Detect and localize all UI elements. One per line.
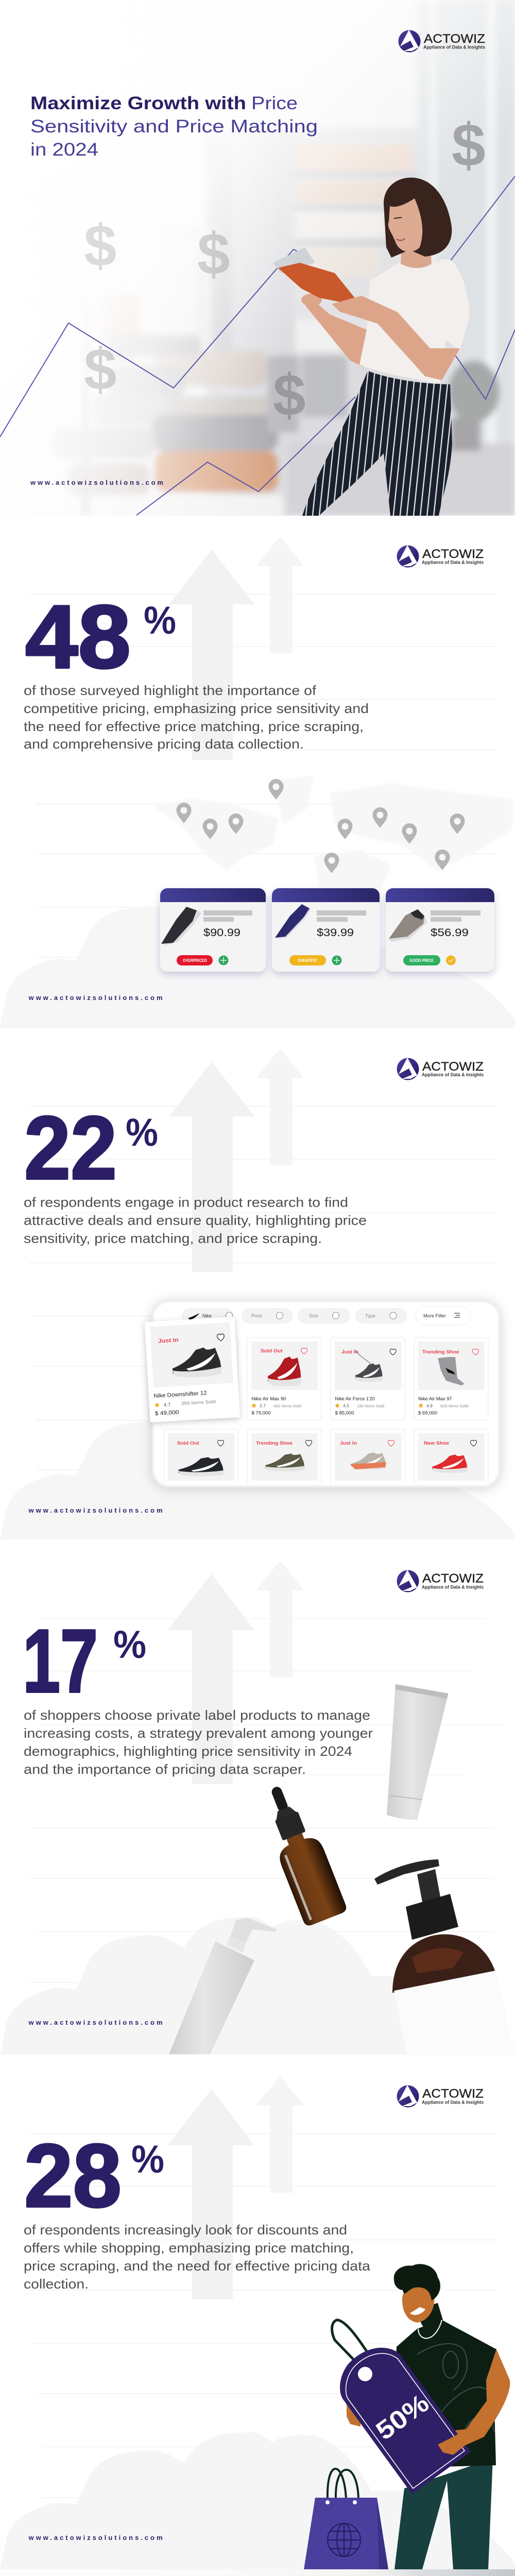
statistic 28%: % [131,2138,164,2181]
dollar signs: $ [84,213,116,279]
featured card: Nike Downshifter 12: 4.7 [164,1402,170,1408]
product: amber pump bottle [374,1859,515,2054]
small arrow [256,536,304,653]
website url: www.actowizsolutions.com [28,994,163,1002]
logo: ACTOWIZ [422,547,484,561]
stat description: price scraping, and the need for effective pricing data [24,2258,371,2274]
location pins [176,779,465,873]
statistic 22%: % [126,1111,158,1155]
stat description: and the importance of pricing data scraper. [24,1761,306,1777]
logo [397,2085,484,2107]
stat description: sensitivity, price matching, and price scraping. [24,1230,322,1246]
logo: ACTOWIZ [424,32,485,46]
world map [153,775,512,888]
small arrow [256,1048,304,1165]
price card: overpriced: $90.99 [203,927,241,939]
dollar signs: $ [273,363,305,428]
product: Nike Air Force 1'20: $ 85,000 [335,1411,354,1416]
stat description [24,1194,367,1246]
price card: good price: GOOD PRICE [409,958,434,963]
product: Nike Air Max 97: 4.9 [426,1403,433,1409]
dollar signs: $ [197,222,230,287]
stat description [24,683,369,752]
title: Maximize Growth with [30,93,246,113]
logo: Appliance of Data & Insights [422,1585,484,1590]
filter bar: Nike [202,1313,212,1319]
statistic 48% [25,586,176,687]
price card: overpriced [160,888,266,972]
product: Nike Air Force 1'20 [335,1349,396,1416]
line chart arrows [0,176,515,515]
stat description: competitive pricing, emphasizing price sensitivity and [24,701,369,716]
price card: overpriced: OVERPRICED [183,958,207,963]
woman holding a product pack [273,178,470,516]
stat description: and comprehensive pricing data collection. [24,736,304,752]
statistic 17%: 17 [23,1611,98,1711]
product: Nike Air Force 1'20: Nike Air Force 1'20 [335,1396,375,1402]
discount price tag [332,2320,471,2494]
product: Nike Air Max 97: Nike Air Max 97 [418,1396,452,1402]
filter bar [182,1307,471,1325]
logo [397,545,484,568]
panel: 17% stat [0,1561,515,2055]
cloud background [0,1917,515,2055]
stat description: increasing costs, a strategy prevalent among younger [24,1725,373,1741]
product: Nike Air Force 1'20: 196 Items Sold [357,1403,384,1409]
featured card: Nike Downshifter 12: Nike Downshifter 12 [153,1390,207,1399]
second row products: New Shoe [424,1440,449,1446]
big arrow [169,550,254,760]
statistic 48%: 48 [25,586,131,687]
logo: ACTOWIZ [422,2087,484,2101]
featured card: Nike Downshifter 12: Just In [158,1337,179,1345]
logo [397,1058,484,1080]
second row products [177,1440,476,1476]
product: Nike Air Max 90: Sold Out [261,1348,282,1353]
panel: call to action [266,2569,515,2576]
stat description: collection. [24,2276,89,2292]
second row products: Sold Out [177,1440,199,1446]
logo: ACTOWIZ [422,1060,484,1074]
filter bar: More Filter [423,1313,446,1319]
dollar signs: $ [84,337,116,402]
statistic 28%: 28 [24,2125,122,2226]
product: Nike Air Max 90: 402 Items Sold [273,1403,301,1409]
stat description [24,1707,373,1777]
website url: www.actowizsolutions.com [28,2019,163,2026]
product: Nike Air Force 1'20: Just In [341,1349,358,1354]
featured card: Nike Downshifter 12: 369 Items Sold [181,1399,216,1406]
discount price tag: 50% [371,2388,434,2446]
price card: cheapest: CHEAPEST [298,958,318,963]
product: white tube [387,1684,448,1820]
grid cards [164,1337,488,1484]
stat description: offers while shopping, emphasizing price matching, [24,2240,354,2256]
website url: www.actowizsolutions.com [30,479,163,486]
logo: Appliance of Data & Insights [422,2100,484,2105]
hero photo background: blurred store [0,0,515,516]
panel: 28% stat [0,2076,515,2569]
price card: good price [386,888,494,972]
price card: good price: $56.99 [431,927,469,939]
filter bar: Price [251,1313,262,1319]
product: dropper bottle [254,1779,348,1927]
product: Nike Air Max 90: Nike Air Max 90 [251,1396,286,1402]
title: Price [251,93,298,113]
second row products: Trending Shoe [256,1440,293,1446]
statistic 22%: 22 [24,1097,117,1198]
product: Nike Air Max 97: $ 69,000 [418,1411,437,1416]
website url: www.actowizsolutions.com [28,2534,163,2541]
stat description: attractive deals and ensure quality, highlighting price [24,1213,367,1228]
logo [397,1570,484,1592]
product: white pump bottle [169,1918,277,2054]
statistic 17%: % [113,1623,146,1667]
stat description: of respondents engage in product research to find [24,1194,348,1210]
title: Sensitivity and Price Matching [30,116,318,137]
cloud background [0,2432,515,2569]
stat description: of those surveyed highlight the importance of [24,683,317,698]
dollar signs: $ [452,111,486,179]
cloud background [0,1403,515,1539]
title: in 2024 [30,140,98,160]
product: Nike Air Max 97: 929 Items Sold [440,1403,468,1409]
second row products: Just In [340,1440,357,1446]
price card: cheapest: $39.99 [317,927,354,939]
big arrow [167,1574,254,1784]
filter bar: Size [309,1313,318,1319]
big arrow [169,1062,254,1272]
background photo: hands on documents [0,2569,515,2576]
stat description: of respondents increasingly look for discounts and [24,2222,347,2238]
logo: Appliance of Data & Insights [422,560,484,565]
dollar signs [84,111,486,428]
small arrow [256,2076,304,2193]
filter bar: Type [365,1313,375,1319]
stat description: demographics, highlighting price sensitivity in 2024 [24,1743,352,1759]
statistic 48%: % [144,599,176,642]
product: Nike Air Max 97: Trending Shoe [422,1349,459,1354]
logo: Appliance of Data & Insights [422,1072,484,1077]
stat description [24,2222,371,2292]
product: Nike Air Max 90: $ 79,000 [251,1411,271,1416]
logo: Appliance of Data & Insights [423,44,485,49]
man holding a discount tag [347,2264,510,2569]
cloud background [0,888,515,1028]
logo: ACTOWIZ [422,1571,484,1586]
product: Nike Air Max 97 [418,1349,478,1416]
product: Nike Air Max 90: 3.7 [260,1403,266,1409]
stat description: the need for effective price matching, price scraping, [24,719,364,734]
featured card: Nike Downshifter 12 [145,1317,240,1422]
panel: 48% stat [0,537,515,1028]
stat description: of shoppers choose private label products to manage [24,1707,370,1723]
featured card: Nike Downshifter 12: $ 49,000 [155,1409,179,1417]
small arrow [256,1561,304,1677]
title [30,93,318,160]
website url: www.actowizsolutions.com [28,1506,163,1514]
big arrow [167,2089,254,2299]
shopping bag with globe [304,2469,388,2569]
product: Nike Air Force 1'20: 4.5 [343,1403,349,1409]
logo [399,30,485,53]
panel: 22% stat [0,1049,515,1539]
product listing panel [145,1301,499,1486]
product: Nike Air Max 90 [251,1348,307,1416]
price card: cheapest [272,888,380,972]
